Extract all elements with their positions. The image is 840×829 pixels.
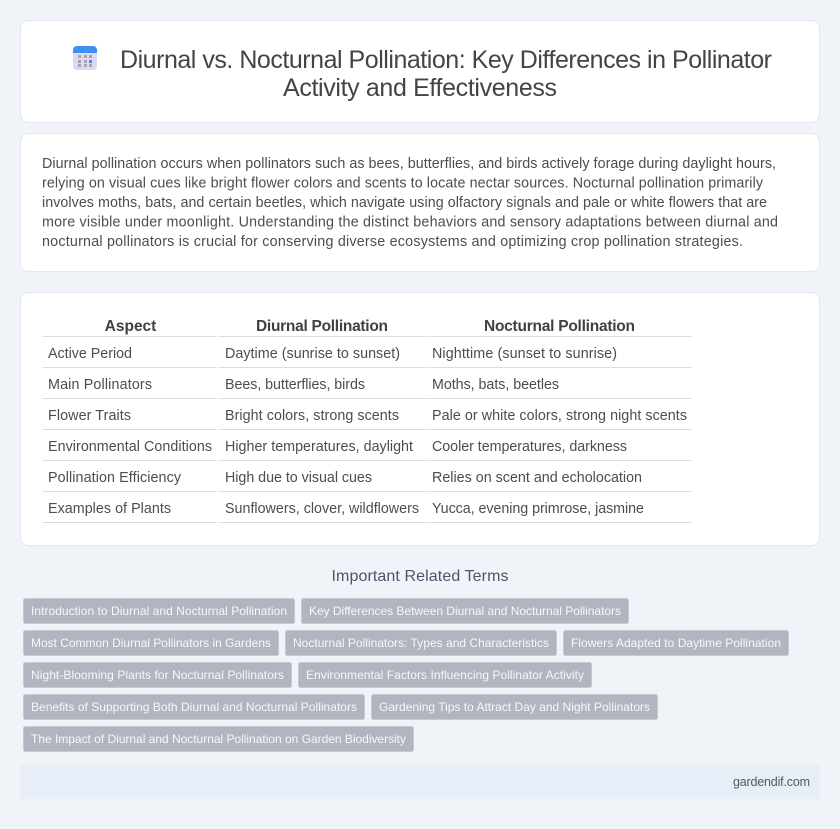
title [120, 46, 772, 102]
table row: active period: Active Period [48, 346, 132, 362]
tag: Night-Blooming Plants for Nocturnal Pollinators [31, 668, 284, 682]
tag: Most Common Diurnal Pollinators in Gardens [31, 636, 271, 650]
text block: introduction paragraph: involves moths, bats, and certain beetles, which navigate using olfactory signals and pale or white flowers that are [42, 195, 767, 211]
tag: Gardening Tips to Attract Day and Night Pollinators [379, 700, 650, 714]
table row: environmental conditions: Higher temperatures, daylight [225, 439, 413, 455]
icon: calendar [73, 46, 97, 70]
table row: examples of plants: Yucca, evening primrose, jasmine [432, 501, 644, 517]
table row: environmental conditions: Cooler temperatures, darkness [432, 439, 627, 455]
tag: Environmental Factors Influencing Pollinator Activity [306, 668, 584, 682]
table row: pollination efficiency: Relies on scent and echolocation [432, 470, 642, 486]
panel: comparison table [20, 292, 820, 546]
tag [302, 598, 628, 624]
table row: environmental conditions [48, 439, 627, 455]
tag: Benefits of Supporting Both Diurnal and Nocturnal Pollinators [31, 700, 357, 714]
tag [24, 726, 414, 752]
footer bar: gardendif.com [733, 775, 810, 789]
tag: Key Differences Between Diurnal and Nocturnal Pollinators [309, 604, 621, 618]
table row: main pollinators: Main Pollinators [48, 377, 152, 393]
title: Diurnal vs. Nocturnal Pollination: Key Differences in Pollinator [120, 46, 772, 74]
tag [24, 598, 294, 624]
table header row [105, 318, 635, 335]
text block: introduction paragraph: more visible under moonlight. Understanding the distinct behaviors and sensory adaptations between diurnal and [42, 215, 778, 231]
table row: examples of plants [48, 501, 644, 517]
text block: introduction paragraph: Diurnal pollination occurs when pollinators such as bees, butterflies, and birds actively forage during daylight hours, [42, 156, 776, 172]
panel: introduction text [20, 134, 820, 272]
text block: introduction paragraph: nocturnal pollinators is crucial for conserving diverse ecosystems and optimizing crop pollination strategies. [42, 234, 743, 250]
tag [24, 662, 292, 688]
tag: Nocturnal Pollinators: Types and Characteristics [293, 636, 549, 650]
title: Activity and Effectiveness [283, 74, 557, 102]
table row: environmental conditions: Environmental Conditions [48, 439, 212, 455]
tag [298, 662, 592, 688]
table row: flower traits [48, 408, 687, 424]
tag: The Impact of Diurnal and Nocturnal Pollination on Garden Biodiversity [31, 732, 406, 746]
table header row: Aspect [105, 318, 156, 335]
tag [24, 694, 364, 720]
table row: pollination efficiency: Pollination Efficiency [48, 470, 182, 486]
tag [564, 630, 788, 656]
table row: main pollinators: Moths, bats, beetles [432, 377, 559, 393]
tag [372, 694, 658, 720]
table row: examples of plants: Examples of Plants [48, 501, 171, 517]
table header row: Diurnal Pollination [256, 318, 388, 335]
table row: main pollinators: Bees, butterflies, birds [225, 377, 365, 393]
text block: introduction paragraph: relying on visual cues like bright flower colors and scents to locate nectar sources. Nocturnal pollination primarily [42, 176, 764, 192]
tag list: related terms [24, 598, 788, 752]
table row: active period: Nighttime (sunset to sunrise) [432, 346, 617, 362]
tag: Introduction to Diurnal and Nocturnal Pollination [31, 604, 287, 618]
table row: pollination efficiency: High due to visual cues [225, 470, 372, 486]
heading: important related terms: Important Related Terms [332, 568, 508, 585]
footer bar [20, 765, 820, 799]
panel: title header [20, 20, 820, 122]
tag [24, 630, 278, 656]
text block: introduction paragraph [42, 156, 778, 250]
tag: Flowers Adapted to Daytime Pollination [571, 636, 781, 650]
table row: active period [48, 346, 617, 362]
table row: flower traits: Bright colors, strong scents [225, 408, 399, 424]
table row: main pollinators [48, 377, 559, 393]
table row: examples of plants: Sunflowers, clover, wildflowers [225, 501, 419, 517]
table row: pollination efficiency [48, 470, 642, 486]
table row: flower traits: Pale or white colors, strong night scents [432, 408, 687, 424]
tag [286, 630, 556, 656]
table header row: Nocturnal Pollination [484, 318, 635, 335]
table row: active period: Daytime (sunrise to sunset) [225, 346, 400, 362]
table row: flower traits: Flower Traits [48, 408, 131, 424]
